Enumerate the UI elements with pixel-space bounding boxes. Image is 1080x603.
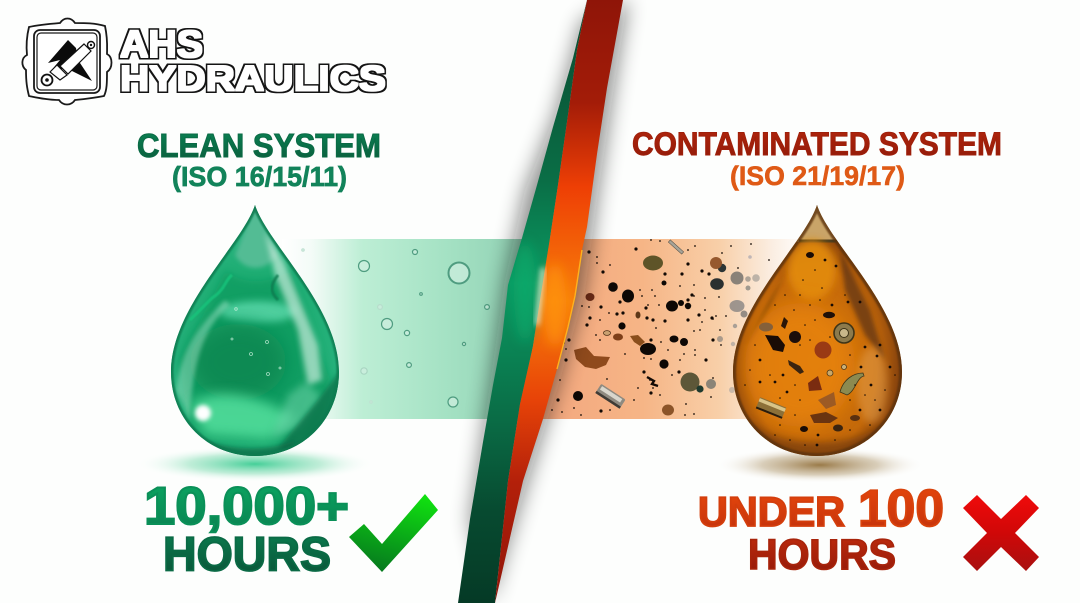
metal shards [595, 240, 684, 409]
heading: contaminated system: CONTAMINATED SYSTEM [632, 126, 1002, 162]
drop shadow: clean [135, 446, 375, 482]
divider body [458, 0, 623, 603]
contaminated band particles [552, 240, 769, 416]
screw fragment [647, 377, 658, 386]
drop shadow: contaminated [715, 447, 925, 483]
value number: 10,000+ [144, 477, 349, 536]
clean band bubbles [302, 249, 489, 407]
value: 10,000+ hours [144, 477, 349, 582]
divider orange glow [544, 263, 566, 347]
divider edge highlight [557, 250, 582, 369]
divider red half [495, 0, 623, 603]
divider centre glow [537, 268, 543, 325]
value number: 100 [858, 480, 944, 538]
divider green glow [514, 242, 536, 342]
logo wordmark AHS: AHS [120, 24, 203, 66]
logo emblem [22, 18, 111, 104]
icon: red cross [963, 495, 1039, 571]
band: contaminated oil background [535, 239, 805, 419]
value unit: HOURS [748, 531, 896, 579]
divider green half [450, 0, 587, 603]
heading: clean system: CLEAN SYSTEM [137, 127, 381, 164]
value label: UNDER [698, 488, 845, 535]
logo wordmark HYDRAULICS: HYDRAULICS [120, 60, 386, 98]
grey and olive particles [643, 255, 760, 393]
subheading: contaminated ISO code: (ISO 21/19/17) [730, 161, 905, 191]
diagonal divider [450, 0, 640, 603]
rust flakes [574, 257, 722, 416]
icon: green check mark [349, 494, 438, 572]
value unit: HOURS [163, 528, 331, 582]
band: clean oil background [282, 239, 532, 419]
subheading: clean ISO code: (ISO 16/15/11) [172, 161, 347, 192]
fine dark specks [558, 249, 713, 411]
divider shadow [470, 0, 628, 603]
drop: contaminated amber oil [733, 205, 902, 460]
logo [22, 18, 203, 104]
drop: clean green oil [171, 205, 339, 462]
value: under 100 hours [698, 480, 944, 579]
large dark particles [573, 280, 691, 401]
